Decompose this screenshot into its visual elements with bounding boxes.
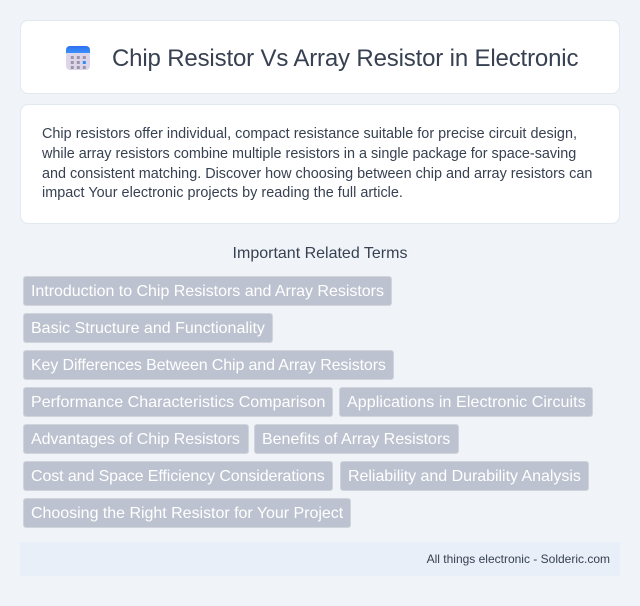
tag: Performance Characteristics Comparison bbox=[31, 394, 325, 411]
tag: Key Differences Between Chip and Array Resistors bbox=[31, 357, 386, 374]
icon: calendar grid bbox=[66, 46, 90, 70]
tag bbox=[23, 313, 273, 343]
tag: Advantages of Chip Resistors bbox=[31, 431, 240, 448]
tag bbox=[23, 387, 333, 417]
intro paragraph: and consistent matching. Discover how choosing between chip and array resistors can bbox=[42, 166, 592, 182]
intro paragraph: Chip resistors offer individual, compact resistance suitable for precise circuit design, bbox=[42, 126, 577, 142]
tag bbox=[23, 498, 351, 528]
intro paragraph: while array resistors combine multiple resistors in a single package for space-saving bbox=[42, 146, 576, 162]
tag bbox=[23, 424, 249, 454]
tag: Applications in Electronic Circuits bbox=[347, 394, 586, 411]
tag bbox=[23, 461, 333, 491]
header card bbox=[20, 20, 620, 94]
tag: Basic Structure and Functionality bbox=[31, 320, 265, 337]
intro card bbox=[20, 104, 620, 224]
tag: Choosing the Right Resistor for Your Project bbox=[31, 505, 343, 522]
intro paragraph bbox=[42, 126, 592, 201]
tag bbox=[340, 461, 589, 491]
tag list bbox=[23, 276, 593, 528]
tag bbox=[339, 387, 593, 417]
footer text: All things electronic - Solderic.com bbox=[427, 552, 610, 566]
tag bbox=[23, 350, 394, 380]
tag: Benefits of Array Resistors bbox=[262, 431, 450, 448]
tag: Introduction to Chip Resistors and Array Resistors bbox=[31, 283, 384, 300]
intro paragraph: impact Your electronic projects by reading the full article. bbox=[42, 185, 403, 201]
footer bar bbox=[20, 542, 620, 576]
title: Chip Resistor Vs Array Resistor in Electronic bbox=[112, 45, 578, 72]
tag: Cost and Space Efficiency Considerations bbox=[31, 468, 325, 485]
tag: Reliability and Durability Analysis bbox=[348, 468, 581, 485]
tag bbox=[254, 424, 459, 454]
tag bbox=[23, 276, 392, 306]
section heading: Important Related Terms bbox=[233, 245, 407, 262]
